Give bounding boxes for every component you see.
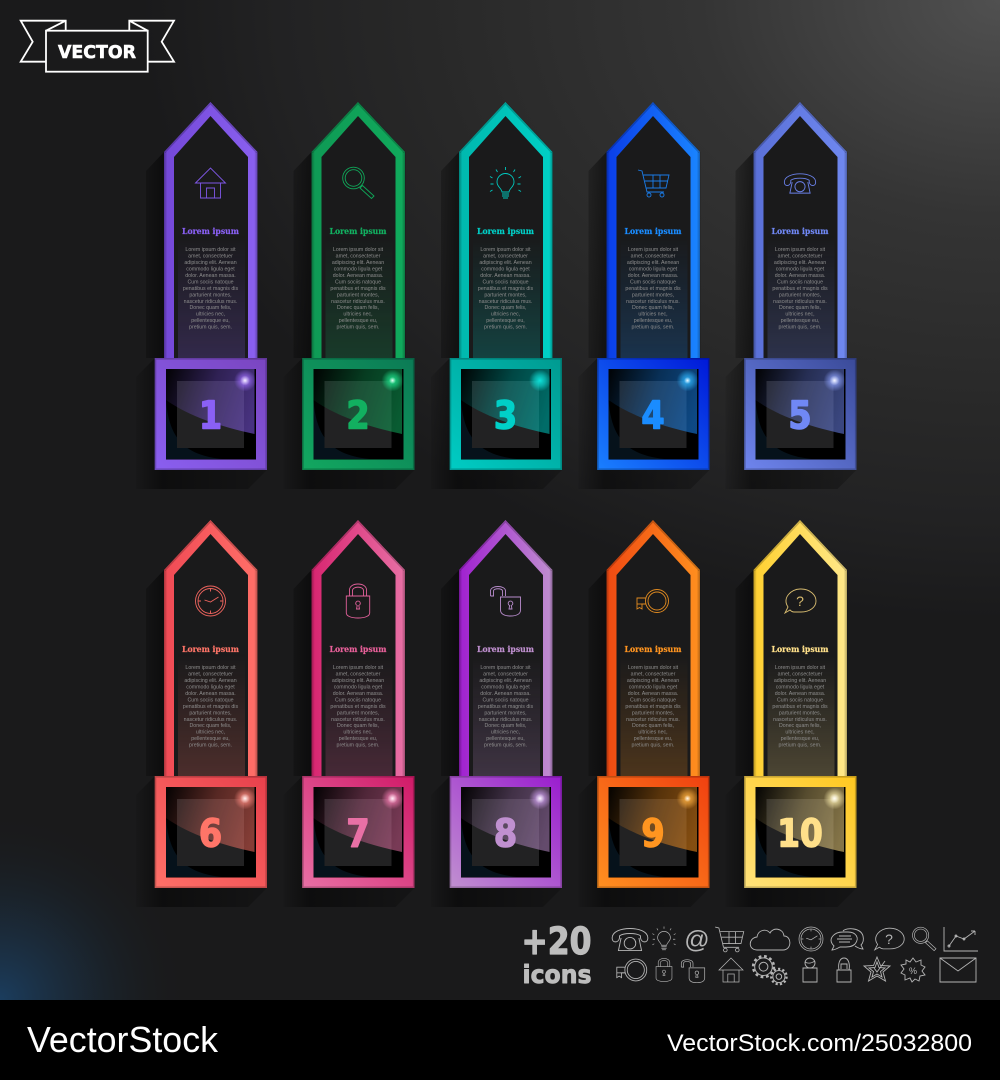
body text 9: pellentesque eu,: [634, 736, 672, 742]
body text 4: ultricies nec,: [638, 312, 668, 318]
body text 9: Cum sociis natoque: [630, 697, 676, 703]
body text 6: pellentesque eu,: [191, 736, 230, 742]
body text 5: Cum sociis natoque: [777, 279, 823, 285]
icon: closed padlock: [346, 584, 370, 618]
body text 1: Cum sociis natoque: [187, 279, 234, 285]
icon set: ?: [885, 931, 893, 947]
body text 9: nascetur ridiculus mus.: [626, 717, 680, 723]
body text 9: parturient montes,: [632, 710, 674, 716]
body text 7: penatibus et magnis dis: [330, 704, 386, 710]
body text 8: nascetur ridiculus mus.: [479, 717, 532, 723]
body text 1: dolor. Aenean massa.: [185, 273, 236, 279]
body text 6: commodo ligula eget: [186, 684, 235, 690]
body text 8: parturient montes,: [484, 710, 527, 716]
body text 8: Cum sociis natoque: [482, 697, 529, 703]
icon: house: [196, 168, 226, 198]
body text 5: pretium quis, sem.: [779, 325, 821, 331]
body text 1: adipiscing elit. Aenean: [184, 260, 237, 266]
number box 6: 6: [199, 813, 222, 856]
body text 6: Lorem ipsum dolor sit: [185, 665, 236, 671]
body text 7: ultricies nec,: [343, 730, 373, 736]
body text 2: parturient montes,: [337, 292, 379, 298]
body text 8: Lorem ipsum dolor sit: [480, 665, 531, 671]
body text 1: Donec quam felis,: [189, 305, 232, 311]
body text 6: nascetur ridiculus mus.: [184, 717, 237, 723]
heading 1: Lorem ipsum: [182, 226, 239, 236]
body text 8: adipiscing elit. Aenean: [479, 678, 532, 684]
body text 4: pretium quis, sem.: [632, 325, 674, 331]
panel 5: periwinkle: [726, 102, 856, 489]
body text 8: ultricies nec,: [491, 730, 520, 736]
number box 4: 4: [641, 395, 665, 438]
body text 4: adipiscing elit. Aenean: [627, 260, 679, 266]
footer bar: [0, 1000, 1000, 1080]
body text 5: nascetur ridiculus mus.: [773, 299, 827, 305]
body text 10: Cum sociis natoque: [777, 697, 823, 703]
heading 6: Lorem ipsum: [182, 644, 239, 654]
body text 3: pretium quis, sem.: [484, 325, 527, 331]
body text 10: parturient montes,: [779, 710, 821, 716]
number box 4: [597, 358, 710, 470]
body text 6: Cum sociis natoque: [187, 697, 234, 703]
body text 6: adipiscing elit. Aenean: [184, 678, 237, 684]
body text 7: nascetur ridiculus mus.: [331, 717, 385, 723]
body text 3: pellentesque eu,: [486, 318, 525, 324]
body text 10: pretium quis, sem.: [779, 743, 821, 749]
body text 2: nascetur ridiculus mus.: [331, 299, 385, 305]
body text 1: parturient montes,: [189, 292, 232, 298]
body text 9: adipiscing elit. Aenean: [627, 678, 679, 684]
body text 8: pretium quis, sem.: [484, 743, 527, 749]
body text 2: amet, consectetuer: [336, 254, 381, 260]
body text 4: dolor. Aenean massa.: [628, 273, 678, 279]
number box 9: 9: [641, 813, 665, 856]
body text 9: penatibus et magnis dis: [625, 704, 681, 710]
body text 1: commodo ligula eget: [186, 266, 235, 272]
number box 6: [155, 776, 267, 888]
body text 2: ultricies nec,: [343, 312, 373, 318]
body text 5: dolor. Aenean massa.: [775, 273, 825, 279]
panel 6: coral: [150, 520, 267, 907]
number box 7: [302, 776, 414, 888]
body text 2: Donec quam felis,: [337, 305, 379, 311]
number box 3: 3: [494, 395, 517, 438]
body text 2: adipiscing elit. Aenean: [332, 260, 384, 266]
body text 6: amet, consectetuer: [188, 672, 233, 678]
body text 8: pellentesque eu,: [486, 736, 525, 742]
number box 10: 10: [777, 812, 823, 856]
panel 7: pink: [298, 520, 414, 907]
body text 9: ultricies nec,: [638, 730, 668, 736]
body text 6: pretium quis, sem.: [189, 743, 232, 749]
icon: question bubble: ?: [796, 593, 804, 609]
body text 4: Cum sociis natoque: [630, 279, 676, 285]
body text 3: adipiscing elit. Aenean: [479, 260, 532, 266]
icon set: [612, 926, 978, 984]
body text 7: parturient montes,: [337, 710, 379, 716]
body text 6: Donec quam felis,: [189, 723, 232, 729]
body text 5: penatibus et magnis dis: [772, 286, 828, 292]
plus 20 icons label: [522, 920, 592, 989]
body text 1: nascetur ridiculus mus.: [184, 299, 237, 305]
body text 7: pellentesque eu,: [339, 736, 377, 742]
body text 7: adipiscing elit. Aenean: [332, 678, 384, 684]
plus 20 icons label: +20: [522, 920, 592, 963]
icon: telephone: [784, 174, 816, 193]
body text 4: Lorem ipsum dolor sit: [628, 247, 679, 253]
icon: open padlock: [490, 586, 520, 616]
body text 6: penatibus et magnis dis: [183, 704, 238, 710]
body text 10: Lorem ipsum dolor sit: [775, 665, 826, 671]
body text 10: dolor. Aenean massa.: [775, 691, 825, 697]
body text 4: commodo ligula eget: [629, 266, 678, 272]
heading 2: Lorem ipsum: [330, 226, 387, 236]
icon: key: [637, 590, 668, 612]
body text 1: penatibus et magnis dis: [183, 286, 238, 292]
body text 10: ultricies nec,: [785, 730, 815, 736]
body text 3: nascetur ridiculus mus.: [479, 299, 532, 305]
number box 10: [744, 776, 856, 888]
body text 9: commodo ligula eget: [629, 684, 678, 690]
body text 3: parturient montes,: [484, 292, 527, 298]
body text 9: Donec quam felis,: [632, 723, 674, 729]
number box 9: [597, 776, 710, 888]
number box 8: [450, 776, 562, 888]
body text 6: dolor. Aenean massa.: [185, 691, 236, 697]
heading 10: Lorem ipsum: [772, 644, 829, 654]
body text 3: Donec quam felis,: [484, 305, 527, 311]
body text 2: Cum sociis natoque: [335, 279, 381, 285]
body text 10: pellentesque eu,: [781, 736, 819, 742]
body text 10: penatibus et magnis dis: [772, 704, 828, 710]
body text 1: ultricies nec,: [196, 312, 225, 318]
body text 9: dolor. Aenean massa.: [628, 691, 678, 697]
body text 3: Cum sociis natoque: [482, 279, 529, 285]
heading 8: Lorem ipsum: [477, 644, 534, 654]
heading 9: Lorem ipsum: [624, 644, 682, 654]
heading 3: Lorem ipsum: [477, 226, 534, 236]
body text 5: pellentesque eu,: [781, 318, 819, 324]
icon: magnifier: [343, 167, 374, 198]
body text 5: commodo ligula eget: [776, 266, 825, 272]
plus 20 icons label: icons: [522, 960, 592, 989]
body text 10: Donec quam felis,: [779, 723, 821, 729]
body text 10: amet, consectetuer: [778, 672, 823, 678]
body text 5: parturient montes,: [779, 292, 821, 298]
body text 2: penatibus et magnis dis: [330, 286, 386, 292]
body text 3: Lorem ipsum dolor sit: [480, 247, 531, 253]
number box 2: 2: [346, 395, 370, 438]
body text 3: ultricies nec,: [491, 312, 520, 318]
body text 9: Lorem ipsum dolor sit: [628, 665, 679, 671]
body text 5: Lorem ipsum dolor sit: [775, 247, 826, 253]
number box 1: 1: [199, 395, 222, 438]
number box 5: 5: [788, 395, 812, 438]
body text 9: amet, consectetuer: [631, 672, 676, 678]
body text 8: Donec quam felis,: [484, 723, 527, 729]
heading 5: Lorem ipsum: [772, 226, 829, 236]
body text 2: pellentesque eu,: [339, 318, 377, 324]
panel 3: teal: [431, 102, 562, 489]
body text 7: dolor. Aenean massa.: [333, 691, 383, 697]
vector ribbon badge: VECTOR: [58, 42, 136, 63]
body text 1: pretium quis, sem.: [189, 325, 232, 331]
body text 1: pellentesque eu,: [191, 318, 230, 324]
body text 4: penatibus et magnis dis: [625, 286, 681, 292]
icon set: %: [909, 966, 917, 976]
number box 3: [450, 358, 562, 470]
panel 8: violet: [446, 520, 562, 907]
vector ribbon badge: [21, 21, 174, 72]
icon: shopping cart: [638, 170, 669, 197]
icon: question bubble: [785, 589, 816, 613]
body text 1: Lorem ipsum dolor sit: [185, 247, 236, 253]
number box 5: [744, 358, 856, 470]
body text 9: pretium quis, sem.: [632, 743, 674, 749]
body text 8: commodo ligula eget: [481, 684, 530, 690]
panel 2: green: [284, 102, 414, 489]
body text 10: commodo ligula eget: [776, 684, 825, 690]
body text 7: commodo ligula eget: [334, 684, 383, 690]
body text 10: adipiscing elit. Aenean: [774, 678, 826, 684]
body text 4: nascetur ridiculus mus.: [626, 299, 680, 305]
panel 1: purple: [150, 102, 267, 489]
body text 2: Lorem ipsum dolor sit: [333, 247, 384, 253]
body text 8: amet, consectetuer: [483, 672, 528, 678]
body text 8: penatibus et magnis dis: [478, 704, 533, 710]
body text 2: commodo ligula eget: [334, 266, 383, 272]
icon set: @: [684, 926, 710, 954]
body text 5: ultricies nec,: [785, 312, 815, 318]
body text 4: Donec quam felis,: [632, 305, 674, 311]
number box 7: 7: [346, 813, 370, 856]
number box 2: [302, 358, 414, 470]
body text 7: Lorem ipsum dolor sit: [333, 665, 384, 671]
panel 4: blue: [578, 102, 710, 489]
body text 4: parturient montes,: [632, 292, 674, 298]
body text 5: adipiscing elit. Aenean: [774, 260, 826, 266]
icon: light bulb: [490, 167, 521, 198]
body text 6: parturient montes,: [189, 710, 232, 716]
body text 5: Donec quam felis,: [779, 305, 821, 311]
body text 4: amet, consectetuer: [631, 254, 676, 260]
body text 3: commodo ligula eget: [481, 266, 530, 272]
body text 3: penatibus et magnis dis: [478, 286, 533, 292]
heading 4: Lorem ipsum: [624, 226, 682, 236]
body text 8: dolor. Aenean massa.: [480, 691, 531, 697]
heading 7: Lorem ipsum: [330, 644, 387, 654]
panel 10: yellow: [740, 520, 856, 907]
body text 3: dolor. Aenean massa.: [480, 273, 531, 279]
body text 7: amet, consectetuer: [336, 672, 381, 678]
footer bar: VectorStock: [27, 1019, 219, 1060]
body text 6: ultricies nec,: [196, 730, 225, 736]
number box 1: [155, 358, 267, 470]
body text 2: dolor. Aenean massa.: [333, 273, 383, 279]
body text 10: nascetur ridiculus mus.: [773, 717, 827, 723]
body text 7: pretium quis, sem.: [337, 743, 379, 749]
number box 8: 8: [494, 813, 517, 856]
body text 2: pretium quis, sem.: [337, 325, 379, 331]
panel 9: orange: [593, 520, 710, 907]
body text 3: amet, consectetuer: [483, 254, 528, 260]
body text 7: Donec quam felis,: [337, 723, 379, 729]
body text 5: amet, consectetuer: [778, 254, 823, 260]
footer bar: VectorStock.com/25032800: [667, 1030, 972, 1057]
body text 1: amet, consectetuer: [188, 254, 233, 260]
icon: clock: [196, 586, 226, 616]
body text 4: pellentesque eu,: [634, 318, 672, 324]
body text 7: Cum sociis natoque: [335, 697, 381, 703]
